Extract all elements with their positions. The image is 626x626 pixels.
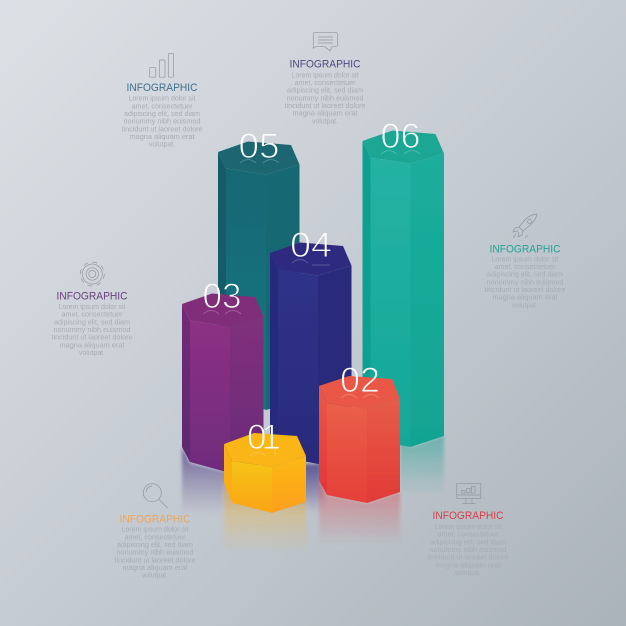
text block: right: nonummy nibh euismod (486, 277, 564, 286)
bar 06 (362, 130, 444, 447)
text block: left: amet, consectetuer (62, 310, 123, 319)
text block: bottom left: Lorem ipsum dolor sit (122, 525, 188, 534)
icon: gear (80, 262, 104, 286)
text block: top center (284, 59, 366, 125)
number labels (202, 117, 420, 457)
text block: top center: magna aliquam erat (292, 109, 358, 118)
bar reflections (182, 436, 444, 553)
text block: right: amet, consectetuer (494, 262, 556, 271)
number 03: 03 (202, 277, 242, 316)
text block: left: tincidunt ut laoreet dolore (52, 333, 132, 342)
text block: bottom right: tincidunt ut laoreet dolore (428, 553, 508, 562)
text block: top center: amet, consectetuer (294, 78, 356, 87)
bar 05 (218, 142, 300, 410)
bar 04 (270, 242, 352, 464)
text block: bottom right (428, 510, 508, 577)
text block: top left: adipiscing elit, sed diam (124, 109, 200, 118)
text block: bottom right: amet, consectetuer (438, 530, 499, 539)
text block: top left: Lorem ipsum dolor sit (128, 94, 196, 103)
text block: right: INFOGRAPHIC (490, 243, 560, 255)
text block: bottom right: volutpat. (455, 568, 481, 577)
icon: magnifier (143, 484, 168, 508)
text block: top left: INFOGRAPHIC (126, 82, 198, 94)
text block: top left: magna aliquam erat (130, 132, 194, 141)
number reflections (203, 150, 420, 457)
text block: top left (122, 82, 202, 149)
text block: bottom left: volutpat. (142, 571, 168, 580)
text block: left: magna aliquam erat (60, 340, 124, 349)
text block: top center: adipiscing elit, sed diam (287, 86, 363, 95)
text block: right (484, 243, 566, 309)
text block: bottom right: Lorem ipsum dolor sit (434, 522, 502, 531)
text block: bottom left: INFOGRAPHIC (120, 513, 190, 525)
text block: bottom left: amet, consectetuer (124, 532, 186, 541)
text block: left: INFOGRAPHIC (56, 290, 128, 302)
text block: top left: volutpat. (149, 140, 175, 149)
text block: top left: tincidunt ut laoreet dolore (122, 124, 202, 133)
text block: right: volutpat. (512, 300, 538, 309)
text block: left: nonummy nibh euismod (54, 325, 130, 334)
icon: rocket (513, 214, 537, 238)
icon: monitor (457, 484, 481, 504)
text block: bottom left: magna aliquam erat (122, 563, 188, 572)
number 06: 06 (380, 117, 420, 156)
text block: left: Lorem ipsum dolor sit (58, 302, 126, 311)
number 04: 04 (290, 226, 332, 265)
bar 02 (319, 376, 400, 503)
text block: top center: volutpat. (312, 116, 338, 125)
text block: bottom right: nonummy nibh euismod (430, 545, 506, 554)
text block: top left: nonummy nibh euismod (124, 117, 200, 126)
text block: bottom right: adipiscing elit, sed diam (430, 537, 506, 546)
text block: left: adipiscing elit, sed diam (54, 317, 130, 326)
text block: bottom left: nonummy nibh euismod (116, 548, 194, 557)
text block: bottom right: magna aliquam erat (436, 560, 500, 569)
number 05: 05 (238, 127, 280, 166)
text block: right: magna aliquam erat (492, 293, 558, 302)
text block: top center: tincidunt ut laoreet dolore (284, 101, 366, 110)
bar 03 (182, 294, 264, 473)
text block: top center: Lorem ipsum dolor sit (292, 70, 358, 79)
number 02: 02 (340, 361, 380, 400)
text block: right: tincidunt ut laoreet dolore (484, 285, 566, 294)
text block: bottom right: INFOGRAPHIC (432, 510, 504, 522)
text block: top center: INFOGRAPHIC (290, 59, 360, 71)
text block: bottom left: tincidunt ut laoreet dolore (114, 555, 196, 564)
number 01: 01 (247, 418, 279, 457)
text block: top center: nonummy nibh euismod (286, 93, 364, 102)
text block: left: volutpat. (79, 348, 105, 357)
text block: bottom left (114, 513, 196, 580)
text block: left (52, 290, 132, 357)
text block: right: Lorem ipsum dolor sit (492, 254, 558, 263)
bar 01 (224, 433, 306, 513)
icon: bar chart (150, 53, 174, 77)
icon: speech bubble (313, 32, 338, 51)
text block: bottom left: adipiscing elit, sed diam (117, 540, 193, 549)
text block: top left: amet, consectetuer (132, 101, 193, 110)
text block: right: adipiscing elit, sed diam (487, 270, 563, 279)
